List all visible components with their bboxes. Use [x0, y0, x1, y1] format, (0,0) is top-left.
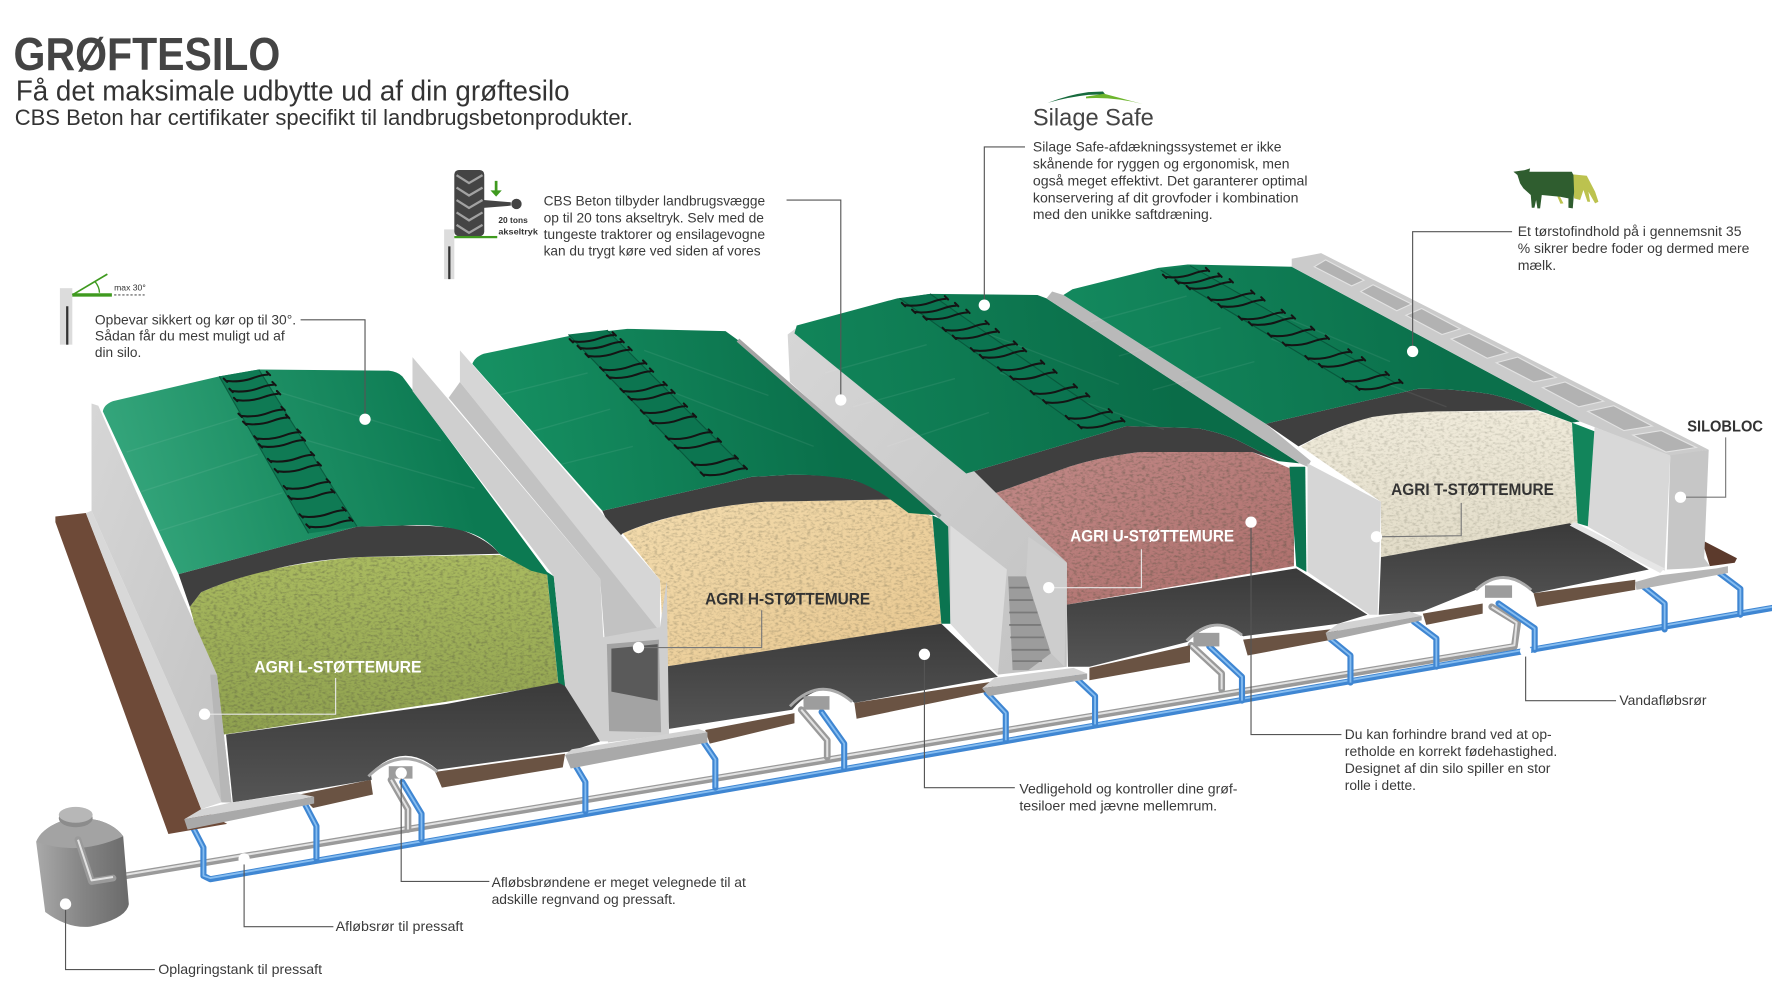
wall strip beside cover — [738, 340, 940, 516]
H wall left plate — [412, 357, 609, 741]
callout: drain wells — [396, 767, 746, 908]
wall L — [92, 403, 232, 802]
silage L — [190, 555, 558, 735]
callout: pressaft pipe: Afløbsrør til pressaft — [336, 919, 463, 935]
icon: tyre: 20 tons — [498, 215, 528, 225]
callout: maintenance: tesiloer med jævne mellemrum. — [1019, 798, 1217, 814]
H wall front frame — [602, 581, 669, 742]
label: Agri U: AGRI U-STØTTEMURE — [1070, 527, 1234, 545]
text: op til 20 tons akseltryk. Selv med de — [544, 211, 764, 227]
foundation soil — [299, 580, 1635, 808]
well 4 — [1476, 577, 1531, 598]
silobloc front panel — [1588, 427, 1670, 571]
floor L — [226, 681, 600, 802]
callout: dry matter and milk — [1407, 168, 1749, 357]
base T — [1326, 611, 1422, 641]
heading: GRØFTESILO — [14, 28, 280, 80]
callout: Silage Safe — [979, 92, 1308, 311]
silobloc wall — [1292, 253, 1710, 573]
base H — [565, 729, 707, 768]
left ground strips — [55, 511, 227, 834]
callout: drain wells: Afløbsbrøndene er meget velegnede til at — [492, 875, 746, 891]
silobloc end face — [1667, 450, 1710, 570]
pipes: water drain pipe (blue) — [190, 572, 1772, 879]
silo 2: H wall section — [412, 329, 998, 768]
logo — [1033, 92, 1154, 131]
well 1 — [368, 759, 437, 779]
U wall stairs — [1008, 576, 1051, 670]
strap strip T — [1161, 266, 1402, 390]
text: mælk. — [1518, 258, 1556, 274]
text: med den unikke saftdræning. — [1033, 207, 1213, 223]
silo 4: T wall section — [1046, 264, 1649, 641]
logo: Silage Safe — [1033, 104, 1154, 131]
callout: fire prevention: rolle i dette. — [1345, 778, 1416, 794]
black plastic L — [179, 525, 500, 607]
callout: water drain pipe: Vandafløbsrør — [1619, 693, 1707, 709]
icon: slope: max 30° — [114, 282, 146, 292]
green cover H — [472, 329, 939, 515]
label: Agri L — [199, 658, 422, 720]
text: din silo. — [95, 345, 141, 361]
fold lines L — [127, 390, 475, 531]
text: konservering af dit grovfoder i kombination — [1033, 190, 1298, 206]
callout: fire prevention — [1245, 516, 1557, 794]
silage T — [1301, 411, 1578, 557]
well 3 — [1187, 625, 1242, 646]
text: skånende for ryggen og ergonomisk, men — [1033, 156, 1289, 172]
cover side L — [547, 573, 565, 686]
callout: pressaft pipe — [238, 853, 463, 935]
green cover T — [1063, 264, 1580, 424]
U wall right arm — [1026, 537, 1067, 667]
label: Agri H: AGRI H-STØTTEMURE — [705, 591, 870, 609]
H wall right plate — [460, 350, 660, 632]
subtitle: Få det maksimale udbytte ud af din grøftesilo — [16, 75, 570, 107]
leader — [301, 320, 371, 425]
callout: storage tank — [60, 898, 322, 978]
H wall recess floor — [449, 382, 659, 640]
title block — [14, 28, 633, 130]
callout: fire prevention: Designet af din silo spiller en stor — [1345, 761, 1551, 777]
floor H — [664, 624, 998, 729]
well 2 — [790, 689, 852, 710]
fold lines U — [825, 328, 1164, 446]
text — [544, 194, 765, 259]
silobloc top — [1292, 253, 1709, 457]
label: Agri H — [633, 591, 870, 653]
callout: 20 tons axle load — [444, 170, 846, 406]
icon: cows — [1513, 168, 1598, 208]
callout: storage tank: Oplagringstank til pressaft — [158, 962, 322, 978]
silobloc chambers — [1314, 260, 1696, 452]
floor T — [1379, 523, 1649, 615]
leader — [1407, 232, 1512, 357]
text: Sådan får du mest muligt ud af — [95, 329, 285, 345]
label: Silobloc — [1675, 419, 1763, 503]
cover side T — [1572, 423, 1596, 527]
text: Opbevar sikkert og kør op til 30°. — [95, 312, 296, 328]
cover side U — [1289, 467, 1306, 572]
black plastic T — [1266, 389, 1538, 446]
icon: tyre: akseltryk — [498, 226, 538, 236]
callout: maintenance: Vedligehold og kontroller dine grøf- — [1019, 781, 1238, 797]
icon: slope — [60, 274, 146, 345]
base L — [184, 793, 314, 829]
strap strip L — [219, 370, 357, 533]
text — [1518, 224, 1749, 274]
leader — [787, 200, 846, 406]
text: Silage Safe-afdækningssystemet er ikke — [1033, 139, 1282, 155]
right ground strips — [1635, 540, 1737, 590]
text: tungeste traktorer og ensilagevogne — [544, 227, 765, 243]
callout: fire prevention: retholde en korrekt fødehastighed. — [1345, 744, 1557, 760]
U wall front face — [950, 525, 1007, 675]
label: Agri L: AGRI L-STØTTEMURE — [254, 658, 422, 676]
leader — [979, 147, 1025, 311]
U wall body — [788, 328, 1067, 675]
silo 1: L wall section — [92, 370, 600, 829]
base U — [982, 668, 1087, 696]
pipes: pressaft drain pipe (grey) — [78, 607, 1518, 881]
icon: tyre — [444, 170, 538, 279]
callout: fire prevention: Du kan forhindre brand ved at op- — [1345, 727, 1552, 743]
T wall ridge — [1046, 292, 1311, 467]
H wall opening — [607, 640, 661, 732]
wall L end edge — [210, 675, 232, 802]
label: Agri U — [1043, 527, 1234, 593]
T wall face — [1308, 463, 1381, 615]
text: % sikrer bedre foder og dermed mere — [1518, 241, 1749, 257]
callout: 30 degree slope — [60, 274, 371, 425]
text: CBS Beton tilbyder landbrugsvægge — [544, 194, 765, 210]
black plastic U — [966, 426, 1278, 494]
cover side H — [932, 515, 950, 624]
floor edge strip — [1570, 522, 1665, 573]
label: Agri T — [1371, 481, 1554, 542]
green cover L — [103, 370, 554, 576]
text: også meget effektivt. Det garanterer optimal — [1033, 173, 1308, 189]
callout: drain wells: adskille regnvand og pressaft. — [492, 892, 676, 908]
strap strip U — [900, 294, 1124, 428]
text — [95, 312, 296, 361]
silo 3: U wall section — [738, 294, 1367, 696]
silage H — [623, 499, 941, 667]
callout: maintenance — [919, 649, 1238, 814]
floor U — [1067, 568, 1367, 667]
callout: water drain pipe — [1520, 645, 1707, 709]
label: Silobloc: SILOBLOC — [1687, 419, 1763, 436]
certificate line: CBS Beton har certifikater specifikt til landbrugsbetonprodukter. — [15, 105, 633, 130]
label: Agri T: AGRI T-STØTTEMURE — [1391, 481, 1554, 499]
text: Et tørstofindhold på i gennemsnit 35 — [1518, 224, 1742, 240]
text: kan du trygt køre ved siden af vores — [544, 243, 761, 259]
strap strip H — [568, 330, 747, 476]
text — [1033, 139, 1308, 223]
drain wells — [368, 577, 1531, 779]
storage tank — [36, 807, 129, 927]
silage U — [993, 452, 1294, 605]
fold lines T — [1091, 296, 1447, 407]
black plastic H — [602, 475, 893, 540]
fold lines H — [497, 350, 814, 469]
green cover U — [794, 294, 1300, 474]
